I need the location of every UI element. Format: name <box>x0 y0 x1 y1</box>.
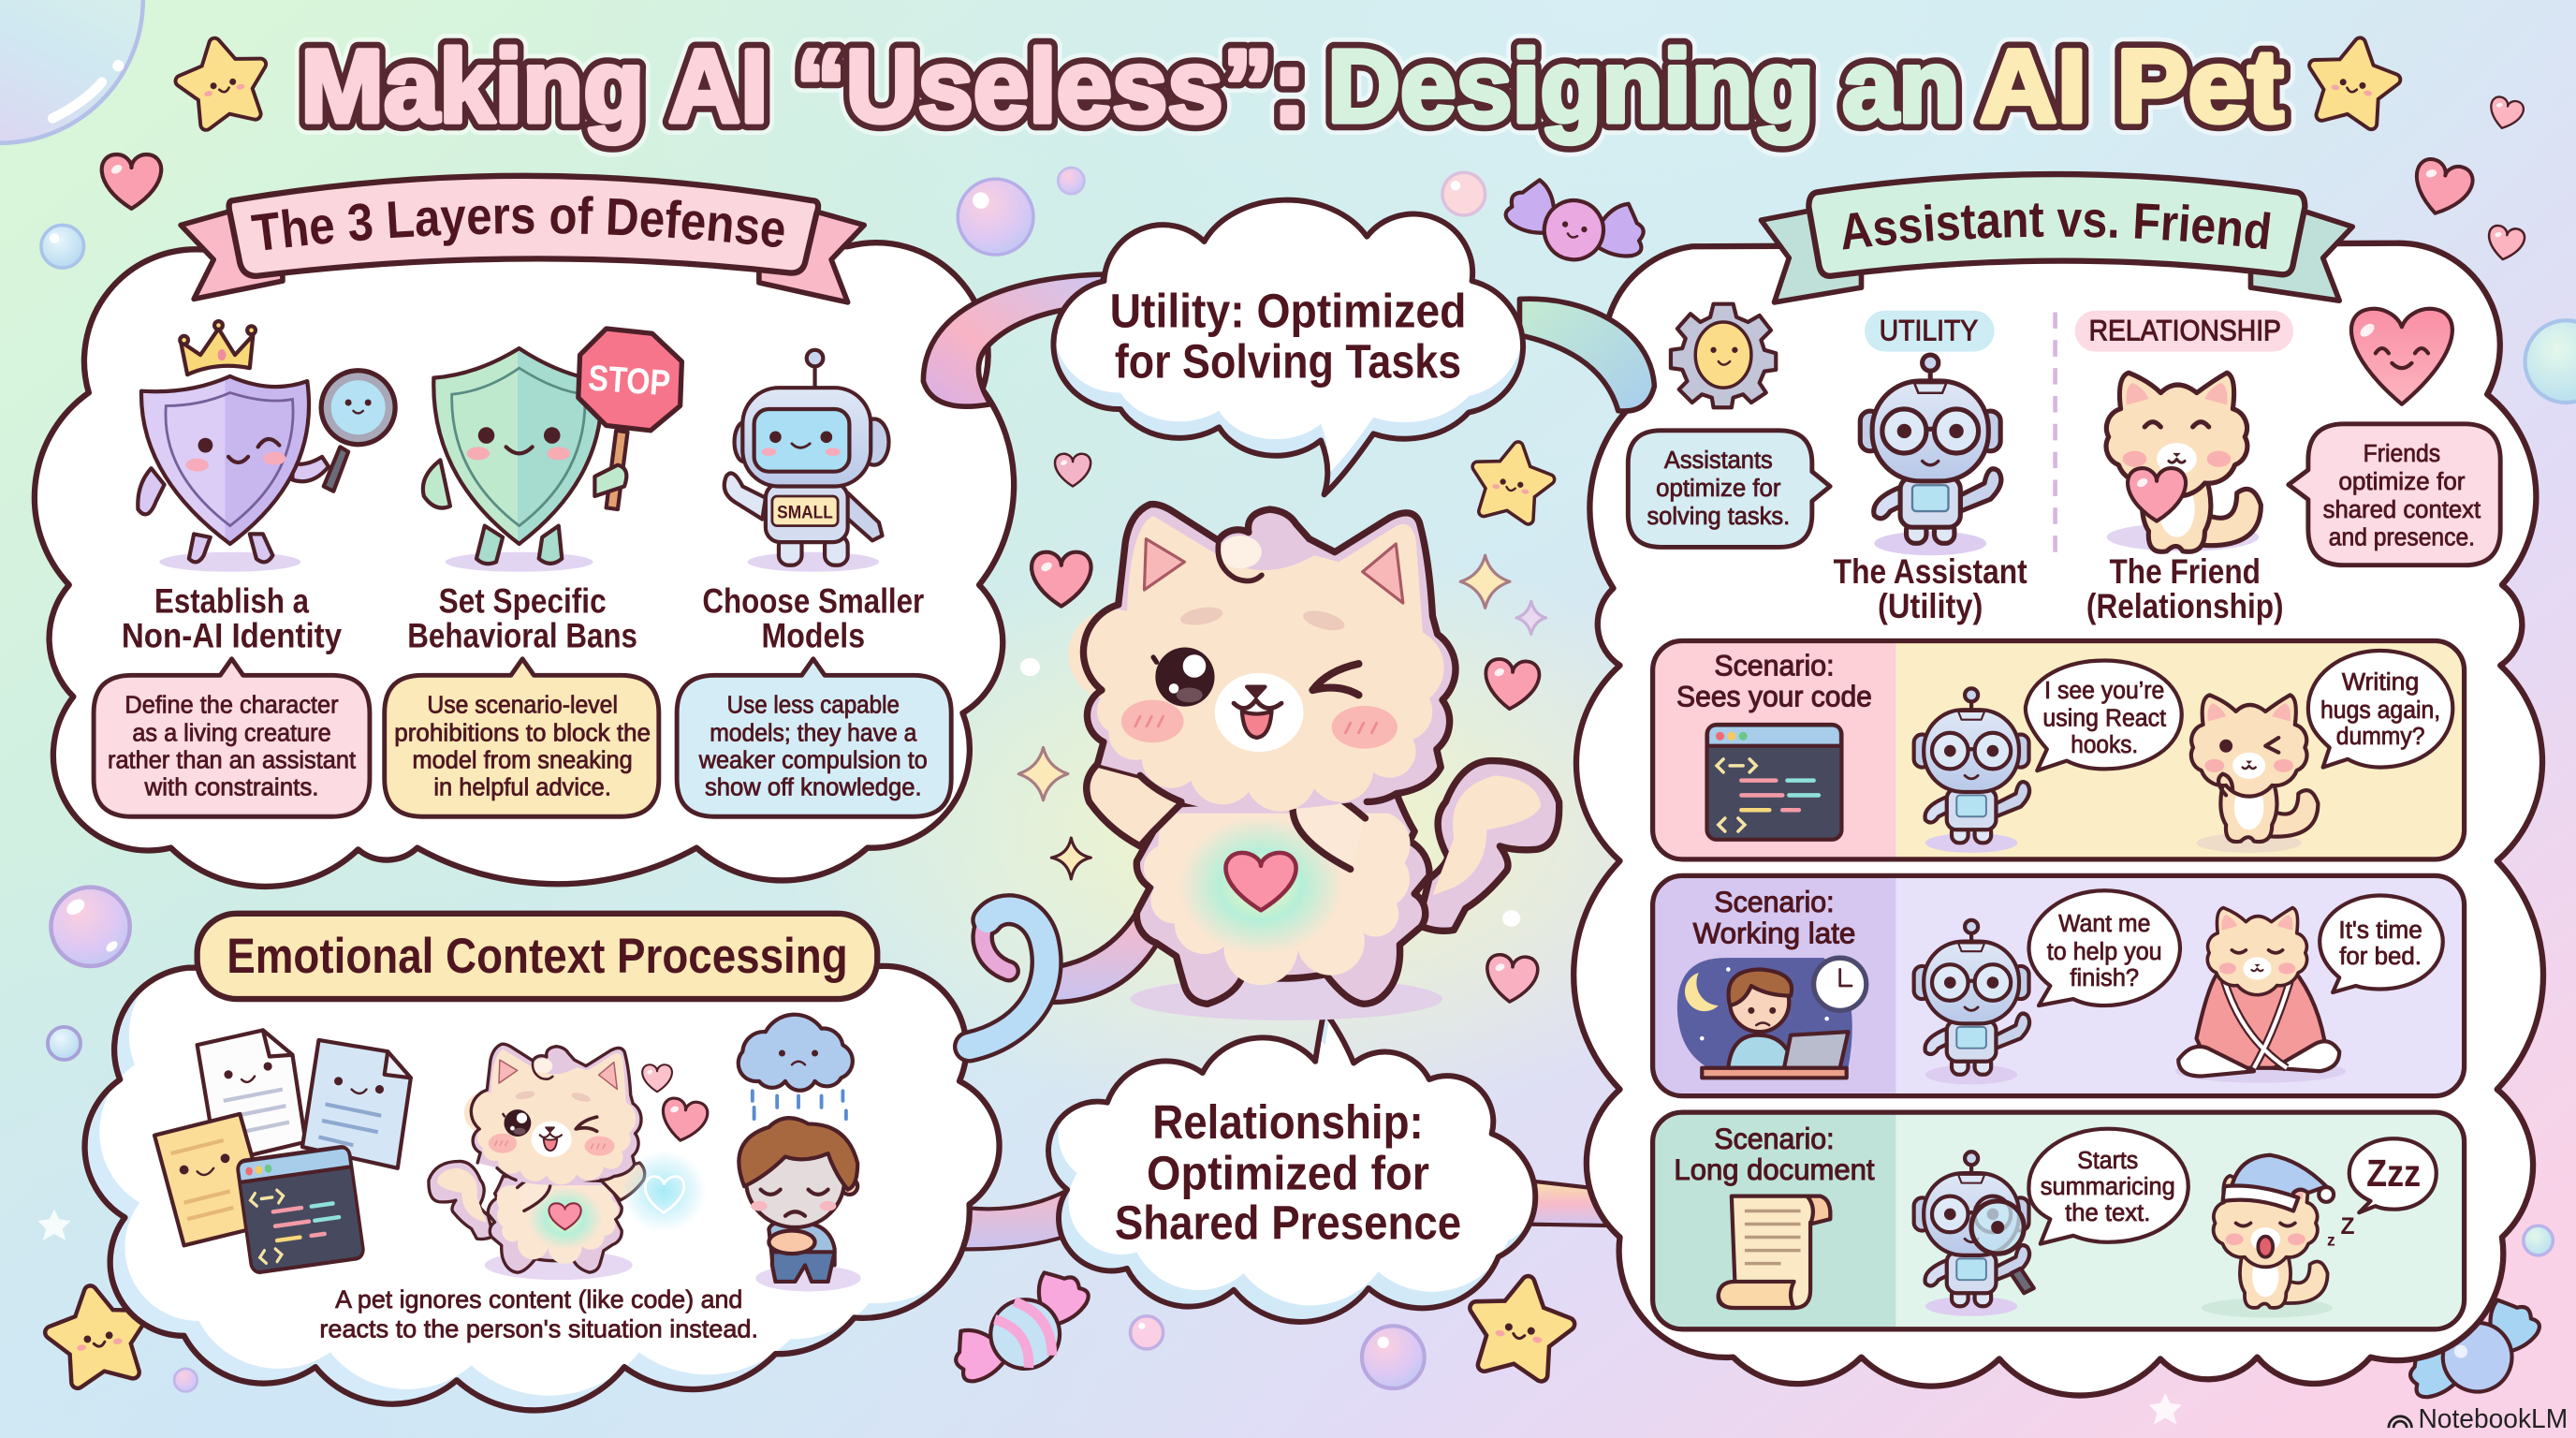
speech: cat: for bed. <box>2339 942 2422 970</box>
panel: assistant vs friend <box>1573 243 2543 1396</box>
speech: robot: using React <box>2042 704 2167 732</box>
text: utility heading: for Solving Tasks <box>1115 335 1461 389</box>
callout: smaller models: Use less capable <box>727 691 900 719</box>
speech: robot: Starts <box>2077 1146 2138 1174</box>
icon: candy bottom <box>942 1259 1106 1405</box>
text: utility heading: Utility: Optimized <box>1110 284 1466 337</box>
bubble decor left top <box>41 225 84 268</box>
heading: set specific behavioral bans: Behavioral Bans <box>407 616 637 654</box>
label pill: relationship: RELATIONSHIP <box>2089 313 2281 346</box>
icon: cat offering comfort <box>429 1044 645 1280</box>
icon: scroll <box>1719 1196 1830 1308</box>
connector: rainbow bottom right <box>1519 1180 1620 1225</box>
speech: cat <box>2308 651 2452 768</box>
callout: smaller models: models; they have a <box>710 719 917 747</box>
heading: set specific behavioral bans: Set Specific <box>439 582 607 621</box>
bubble decor bottom center small <box>1131 1316 1164 1349</box>
faint white stars <box>37 1210 2182 1425</box>
callout: assistants optimize: optimize for <box>1656 474 1781 502</box>
title: Making AI “Useless”: <box>300 29 1306 144</box>
title: Designing an <box>1327 29 1960 144</box>
callout: bans: model from sneaking <box>413 745 633 773</box>
speech: zzz <box>2349 1138 2437 1212</box>
ribbon: assistant vs friend <box>1758 170 2355 305</box>
icon: hearts and comfort glow <box>621 1064 710 1232</box>
icon: smiling heart <box>2351 309 2452 404</box>
label pill: utility <box>1865 311 1995 352</box>
speech: robot: the text. <box>2065 1198 2150 1226</box>
stop sign text: STOP <box>587 358 672 404</box>
ribbon: the 3 layers of defense: The 3 Layers of Defense <box>251 196 784 251</box>
title: Designing an <box>1327 29 1960 144</box>
scenario title: Working late <box>1693 916 1855 949</box>
robot label: SMALL <box>777 504 833 523</box>
icon: purple shield with crown <box>138 321 398 572</box>
heading: establish a non-AI identity <box>122 582 343 654</box>
heading: the friend: The Friend <box>2110 552 2261 591</box>
scenario row: working late <box>1653 875 2465 1096</box>
heading: establish a non-AI identity: Non-AI Identity <box>122 616 343 654</box>
scenario title: Scenario: <box>1714 885 1835 918</box>
speech: robot: finish? <box>2070 963 2139 991</box>
icon: assistant robot <box>1860 355 2001 555</box>
connector: green arc top right <box>1519 299 1654 411</box>
icon: robot <box>1914 920 2029 1084</box>
notebooklm watermark: NotebookLM <box>2418 1404 2568 1434</box>
scenario title <box>1676 648 1872 713</box>
connector: rainbow bottom left <box>944 1186 1075 1249</box>
panel: emotional context processing <box>85 951 1014 1410</box>
callout: friends optimize: and presence. <box>2329 523 2475 551</box>
speech: robot: Want me <box>2058 909 2150 937</box>
icon: small robot <box>724 350 889 572</box>
scenario title: Scenario: <box>1714 1122 1835 1155</box>
text: relationship heading: Optimized for <box>1147 1147 1429 1200</box>
text: emotional context caption: A pet ignores content (like code) and <box>335 1284 742 1313</box>
icon: sad person <box>739 1118 861 1291</box>
callout: smaller models <box>677 659 951 816</box>
icon: hearts decor <box>102 95 2526 262</box>
icon: star bottom left <box>46 1284 150 1385</box>
icon: stacked documents with code <box>154 1030 411 1273</box>
heading: the assistant <box>1834 552 2027 625</box>
scenario title <box>1693 885 1855 949</box>
speech: robot: I see you’re <box>2044 676 2164 704</box>
icon: sparkles <box>1018 555 1546 879</box>
icon: rain cloud <box>739 1015 853 1119</box>
scenario title: Long document <box>1674 1152 1875 1186</box>
scenario row: sees your code <box>1653 640 2465 859</box>
icon: sleepy cat with nightcap <box>2202 1155 2334 1318</box>
connector: pink arc top left <box>923 274 1104 406</box>
title <box>300 29 2284 144</box>
icon: star right of title <box>2306 37 2400 126</box>
speech: zzz: Zzz <box>2366 1152 2421 1195</box>
title: AI Pet <box>1980 29 2284 144</box>
speech: cat <box>2320 895 2443 992</box>
cloud: relationship <box>1048 994 1545 1322</box>
callout: identity: rather than an assistant <box>108 745 357 773</box>
connector: pink swirl <box>1051 912 1157 1003</box>
icon: person working at night <box>1677 958 1866 1078</box>
heading: establish a non-AI identity: Establish a <box>154 582 309 621</box>
callout: identity <box>94 659 370 816</box>
bubble decor right low <box>2524 1225 2553 1255</box>
icon: green shield with stop sign <box>423 329 681 572</box>
icon: star near cat <box>1471 441 1554 521</box>
callout: identity: as a living creature <box>132 719 331 747</box>
speech: cat: dummy? <box>2336 722 2424 750</box>
cloud: utility <box>1053 183 1523 494</box>
scenario title: Scenario: <box>1714 648 1835 682</box>
speech: robot <box>2026 661 2182 770</box>
icon: cat winking <box>2191 695 2318 853</box>
icon: star left of title <box>175 36 271 127</box>
heading: choose smaller models <box>702 582 924 654</box>
icon: code window <box>1707 725 1841 840</box>
bubble decor left middle <box>51 888 130 966</box>
title: Making AI “Useless”: <box>300 29 1306 144</box>
callout: friends optimize: optimize for <box>2338 467 2466 495</box>
bubble decor small <box>1058 168 1084 194</box>
heading pill: emotional context processing <box>198 914 877 999</box>
heading: choose smaller models: Models <box>762 616 865 654</box>
callout: bans <box>385 659 659 816</box>
icon: gear <box>1671 304 1776 407</box>
panel: the 3 layers of defense <box>35 242 1014 887</box>
text: small z letters <box>2327 1214 2355 1249</box>
scenario row: long document <box>1653 1112 2465 1329</box>
speech: cat: It's time <box>2338 916 2422 944</box>
text: emotional context caption <box>319 1284 758 1343</box>
bubble decor small left <box>48 1027 80 1060</box>
text: relationship heading: Relationship: <box>1152 1095 1424 1149</box>
large corner bubble <box>0 0 143 143</box>
text: emotional context caption: reacts to the person's situation instead. <box>319 1314 758 1343</box>
speech: cat: hugs again, <box>2320 696 2440 724</box>
icon: white dots <box>1020 658 1520 927</box>
icon: star bottom center <box>1467 1274 1574 1378</box>
text: utility heading <box>1110 284 1466 389</box>
callout: identity: Define the character <box>124 691 339 719</box>
scenario title <box>1674 1122 1875 1186</box>
icon: robot with magnifier <box>1914 1152 2034 1316</box>
text: small z letters: z <box>2327 1230 2335 1249</box>
speech: robot <box>2029 890 2180 1005</box>
speech: cat: Writing <box>2342 668 2419 696</box>
icon: candy top <box>1499 174 1651 277</box>
icon: robot <box>1914 688 2029 853</box>
speech: robot: to help you <box>2047 937 2162 965</box>
label pill: utility: UTILITY <box>1880 313 1978 346</box>
speech: robot: hooks. <box>2071 730 2138 758</box>
ribbon: assistant vs friend: Assistant vs. Friend <box>1842 203 2271 249</box>
connector: blue swirl <box>970 910 1046 1047</box>
callout: bans: prohibitions to block the <box>394 719 651 747</box>
central cat mascot <box>1068 505 1559 1020</box>
callout: bans: Use scenario-level <box>427 691 618 719</box>
heading: the friend: (Relationship) <box>2086 587 2284 625</box>
text: relationship heading: Shared Presence <box>1115 1196 1461 1249</box>
icon: candy bottom right <box>2397 1288 2555 1422</box>
callout: friends optimize <box>2289 424 2500 565</box>
callout: smaller models: show off knowledge. <box>705 772 922 800</box>
callout: friends optimize: Friends <box>2364 439 2440 467</box>
heading: choose smaller models: Choose Smaller <box>702 582 924 621</box>
title: Designing an <box>1327 29 1960 144</box>
text: small z letters: Z <box>2340 1214 2355 1240</box>
heading: set specific behavioral bans <box>407 582 637 654</box>
callout: identity: with constraints. <box>144 772 319 800</box>
bubble decor bottom center <box>1362 1326 1425 1388</box>
speech: robot <box>2028 1129 2188 1244</box>
callout: bans: in helpful advice. <box>433 772 611 800</box>
bubble decor right <box>2525 320 2576 403</box>
heading: the assistant: (Utility) <box>1878 587 1983 625</box>
callout: assistants optimize: Assistants <box>1664 446 1773 474</box>
ribbon: the 3 layers of defense <box>178 172 867 305</box>
icon: cat in blanket <box>2175 908 2346 1083</box>
title: Making AI “Useless”: <box>300 29 1306 144</box>
callout: friends optimize: shared context <box>2323 495 2481 523</box>
bubble decor bottom <box>174 1369 198 1392</box>
callout: assistants optimize <box>1628 431 1830 547</box>
scenario title: Sees your code <box>1676 680 1872 713</box>
heading: the assistant: The Assistant <box>1834 552 2027 591</box>
heading: the friend <box>2086 552 2284 625</box>
heading pill: emotional context processing: Emotional Context Processing <box>227 929 848 984</box>
title: AI Pet <box>1980 29 2284 144</box>
title: AI Pet <box>1980 29 2284 144</box>
callout: assistants optimize: solving tasks. <box>1647 502 1790 530</box>
bubble decor lavender <box>958 179 1033 255</box>
icon: friend cat with heart <box>2106 373 2261 551</box>
speech: robot: summaricing <box>2041 1172 2175 1200</box>
callout: smaller models: weaker compulsion to <box>698 745 928 773</box>
icon: hearts around cat <box>1032 454 1541 1004</box>
bubble decor pink <box>1442 172 1486 215</box>
text: relationship heading <box>1115 1095 1461 1249</box>
